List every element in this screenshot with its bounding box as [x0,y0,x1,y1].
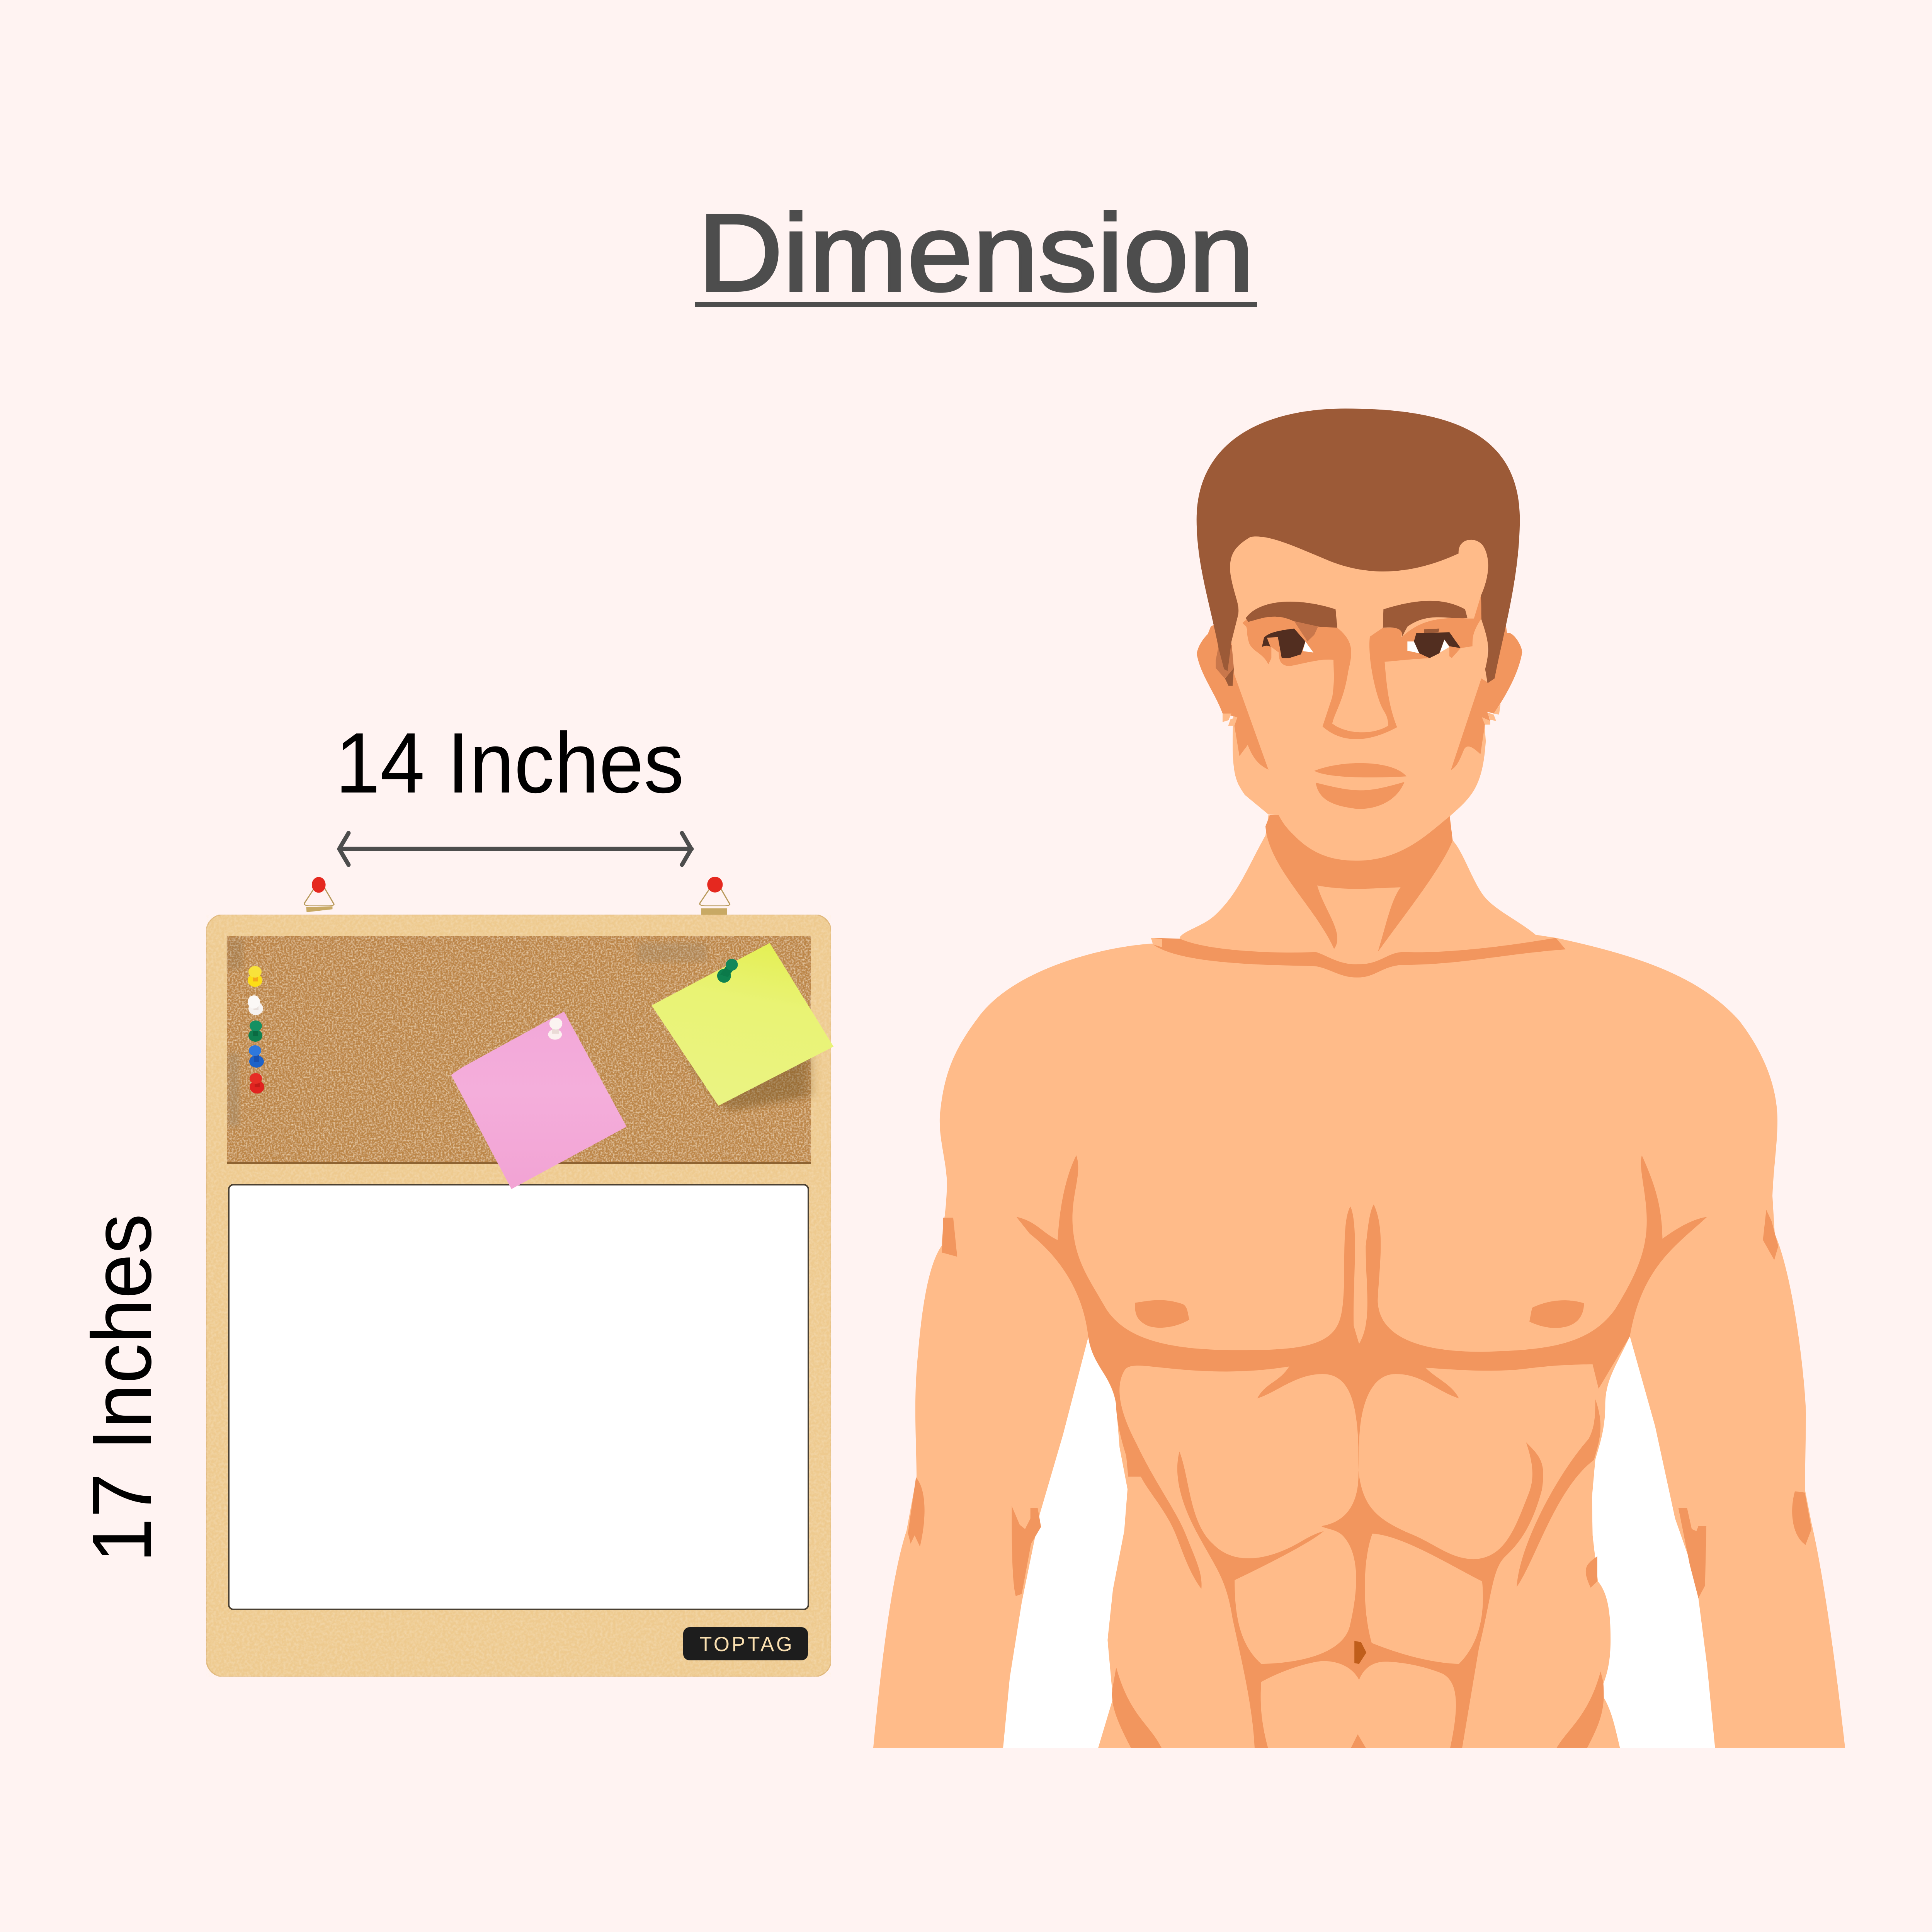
collar line [1151,938,1566,978]
navel [1354,1641,1366,1664]
brand label: TOPTAG [699,1633,792,1656]
right eye [1407,629,1461,658]
sideburn tip [1225,668,1234,686]
width label: 14 Inches: 14 Inches [335,715,684,811]
width arrow [339,833,692,865]
chest and abdomen lines [1016,1155,1707,1748]
left ear inner [1216,645,1234,679]
red pin [250,1073,264,1094]
left elbow mark [908,1478,925,1547]
whiteboard panel [229,1185,808,1609]
cork panel [227,936,811,1164]
middle abdomen fill [1365,1534,1483,1664]
neck shadow [1265,815,1452,952]
left upper arm mark [942,1218,957,1257]
right eyebrow [1383,601,1468,638]
torso and arms silhouette [873,908,1845,1748]
torso muscle shading [908,1155,1811,1748]
left hip [1112,1667,1162,1748]
left nipple [1135,1300,1189,1328]
neck [1180,815,1541,952]
lower lip [1316,782,1405,809]
right elbow mark [1792,1492,1811,1545]
pink note pin [548,1018,562,1040]
left eye [1262,621,1318,658]
height label: 17 Inches: 17 Inches [75,1214,169,1563]
brand label [683,1627,808,1660]
head and neck [1151,408,1566,978]
eye and nose shading [1242,595,1481,739]
right forearm mark [1679,1508,1706,1598]
board frame [206,915,831,1677]
right oblique [1517,1399,1600,1587]
face [1227,516,1490,861]
side notch [1586,1556,1597,1588]
right hip [1557,1672,1604,1748]
gaps between arms and torso [1003,1336,1715,1748]
center mark [1351,1734,1366,1748]
ear lobe flecks [1223,704,1500,726]
yellow sticky note [651,943,833,1106]
upper lip [1314,763,1406,777]
left hanger [304,877,334,912]
right nipple [1529,1300,1584,1328]
yellow note pin [717,959,738,983]
right upper arm mark [1763,1210,1778,1260]
right ear [1451,619,1522,770]
human figure for scale [873,408,1845,1748]
product: cork and white board [206,877,833,1677]
hair [1197,408,1520,683]
pins and notes [304,877,833,1189]
left forearm mark [1012,1506,1041,1596]
yellow note shadow [689,1055,810,1111]
title: Dimension [698,192,1254,314]
pink sticky note [451,1012,627,1189]
white pin [248,995,263,1015]
collar tip highlight [1151,938,1162,947]
left ear [1197,625,1269,770]
green pin [248,1020,262,1042]
blue pin [249,1045,264,1068]
yellow pin [248,966,262,987]
left eyebrow [1246,602,1337,628]
right hanger [700,877,730,915]
